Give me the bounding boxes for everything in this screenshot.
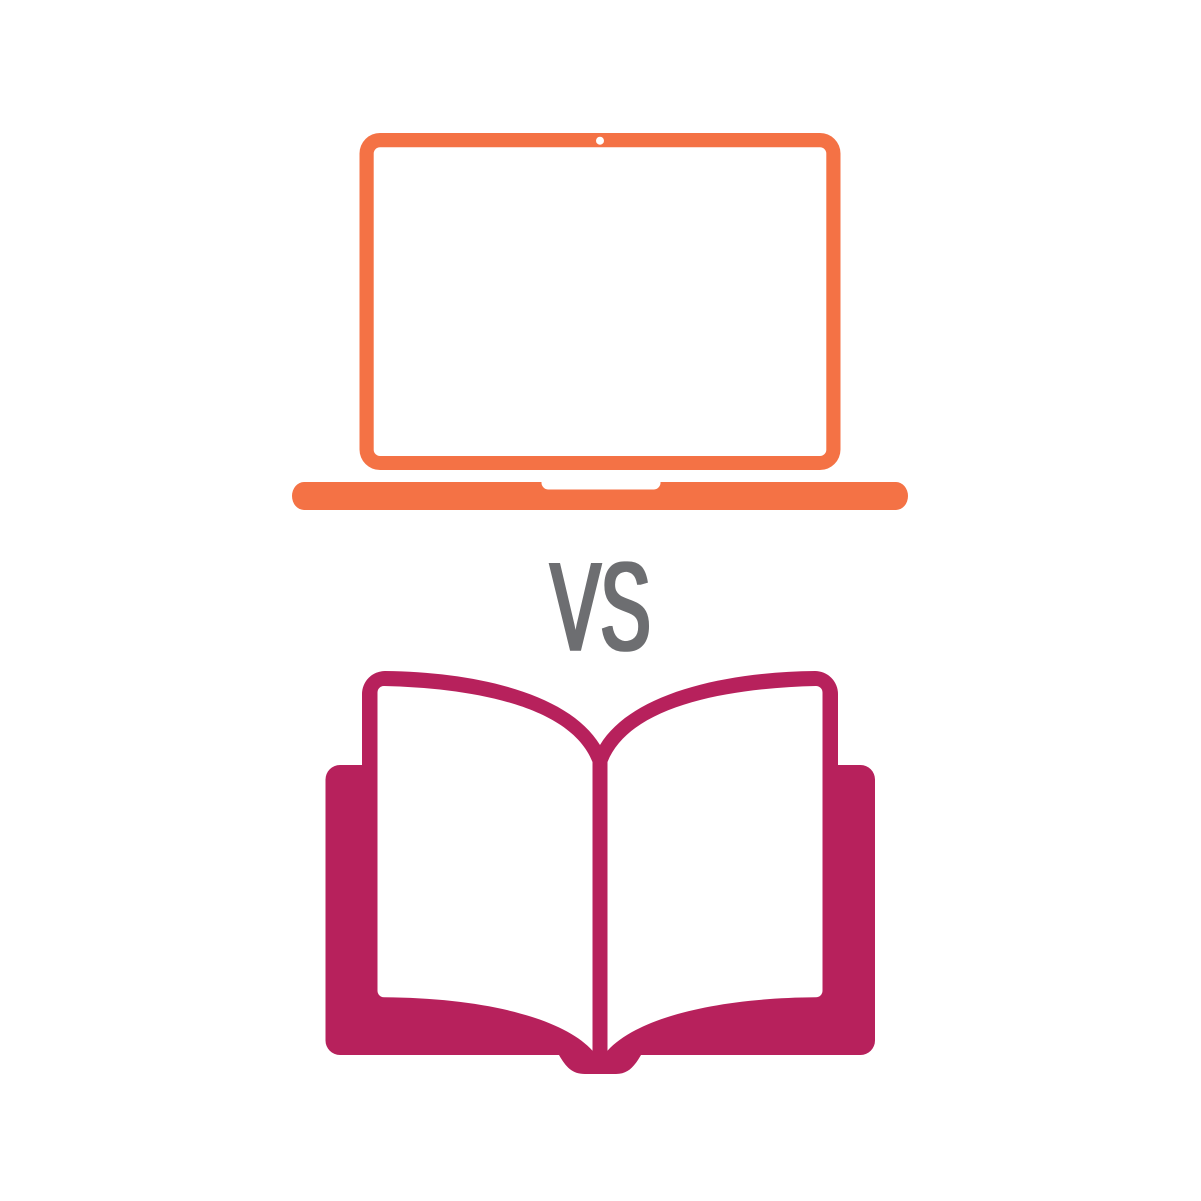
laptop base [292, 482, 908, 510]
icon: open book [326, 671, 875, 1074]
laptop camera [596, 137, 604, 145]
book cover and page outline [326, 671, 875, 1074]
laptop screen frame [360, 133, 840, 470]
right page [608, 686, 822, 1051]
heading: VS: VS [550, 537, 651, 677]
icon: laptop [292, 133, 908, 510]
left page [378, 686, 592, 1051]
